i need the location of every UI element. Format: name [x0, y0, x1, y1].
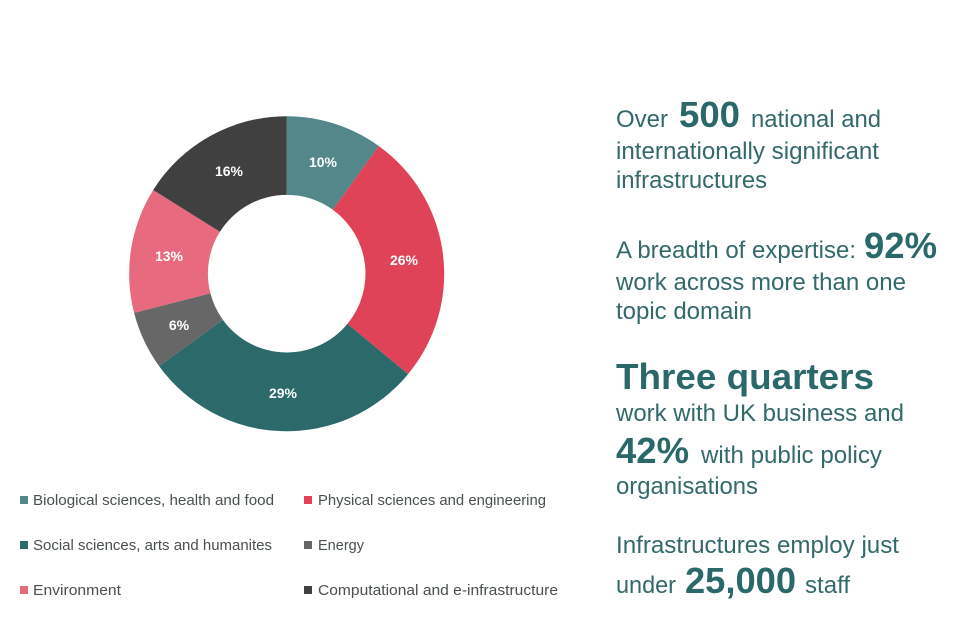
- label: 6%: 6%: [169, 317, 190, 333]
- text block: 25,000 staff: [616, 532, 899, 601]
- slice: biological sciences 10%: [287, 116, 379, 210]
- legend item: social sciences: Social sciences, arts and humanites: [33, 538, 272, 554]
- text block: breadth of expertise 92%: topic domain: [616, 298, 752, 325]
- text block: three quarters and 42%: 42%: [616, 430, 689, 471]
- text block: three quarters and 42%: organisations: [616, 473, 758, 500]
- donut chart: [129, 116, 444, 431]
- slice: energy 6%: [134, 293, 223, 366]
- text block: over 500 infrastructures: 500: [679, 94, 740, 135]
- text block: breadth of expertise 92%: 92%: [864, 225, 937, 266]
- text block: three quarters and 42%: Three quarters: [616, 356, 874, 397]
- text block: over 500 infrastructures: [616, 94, 881, 194]
- legend item: physical sciences: Physical sciences and engineering: [318, 493, 546, 509]
- text block: three quarters and 42%: work with UK business and: [615, 400, 904, 427]
- legend item: environment: Environment: [33, 583, 121, 599]
- text block: breadth of expertise 92%: work across more than one: [615, 269, 906, 296]
- legend item: biological sciences: Biological sciences, health and food: [33, 493, 274, 509]
- text block: over 500 infrastructures: infrastructures: [616, 167, 767, 194]
- text block: 25,000 staff: staff: [805, 572, 850, 599]
- text block: 25,000 staff: Infrastructures employ just: [616, 532, 899, 559]
- label: 10%: 10%: [309, 154, 338, 170]
- label: 29%: 29%: [269, 385, 298, 401]
- text block: 25,000 staff: 25,000: [685, 560, 796, 601]
- legend item: computational: Computational and e-infrastructure: [318, 583, 558, 599]
- text block: breadth of expertise 92%: A breadth of expertise:: [616, 237, 856, 264]
- text block: three quarters and 42%: [615, 356, 904, 500]
- slice: computational 16%: [153, 116, 287, 232]
- label: 13%: 13%: [155, 248, 184, 264]
- label: 16%: 16%: [215, 163, 244, 179]
- text block: over 500 infrastructures: Over: [616, 106, 668, 133]
- text block: over 500 infrastructures: national and: [751, 106, 881, 133]
- slice: physical sciences 26%: [333, 146, 444, 374]
- label: 26%: 26%: [390, 252, 419, 268]
- legend item: energy: Energy: [318, 538, 365, 554]
- legend: [20, 493, 558, 599]
- text block: 25,000 staff: under: [616, 572, 676, 599]
- text block: three quarters and 42%: with public policy: [700, 442, 882, 469]
- text block: breadth of expertise 92%: [615, 225, 937, 325]
- text block: over 500 infrastructures: internationally significant: [616, 138, 879, 165]
- slice: social sciences 29%: [159, 320, 408, 431]
- slice: environment 13%: [129, 190, 220, 313]
